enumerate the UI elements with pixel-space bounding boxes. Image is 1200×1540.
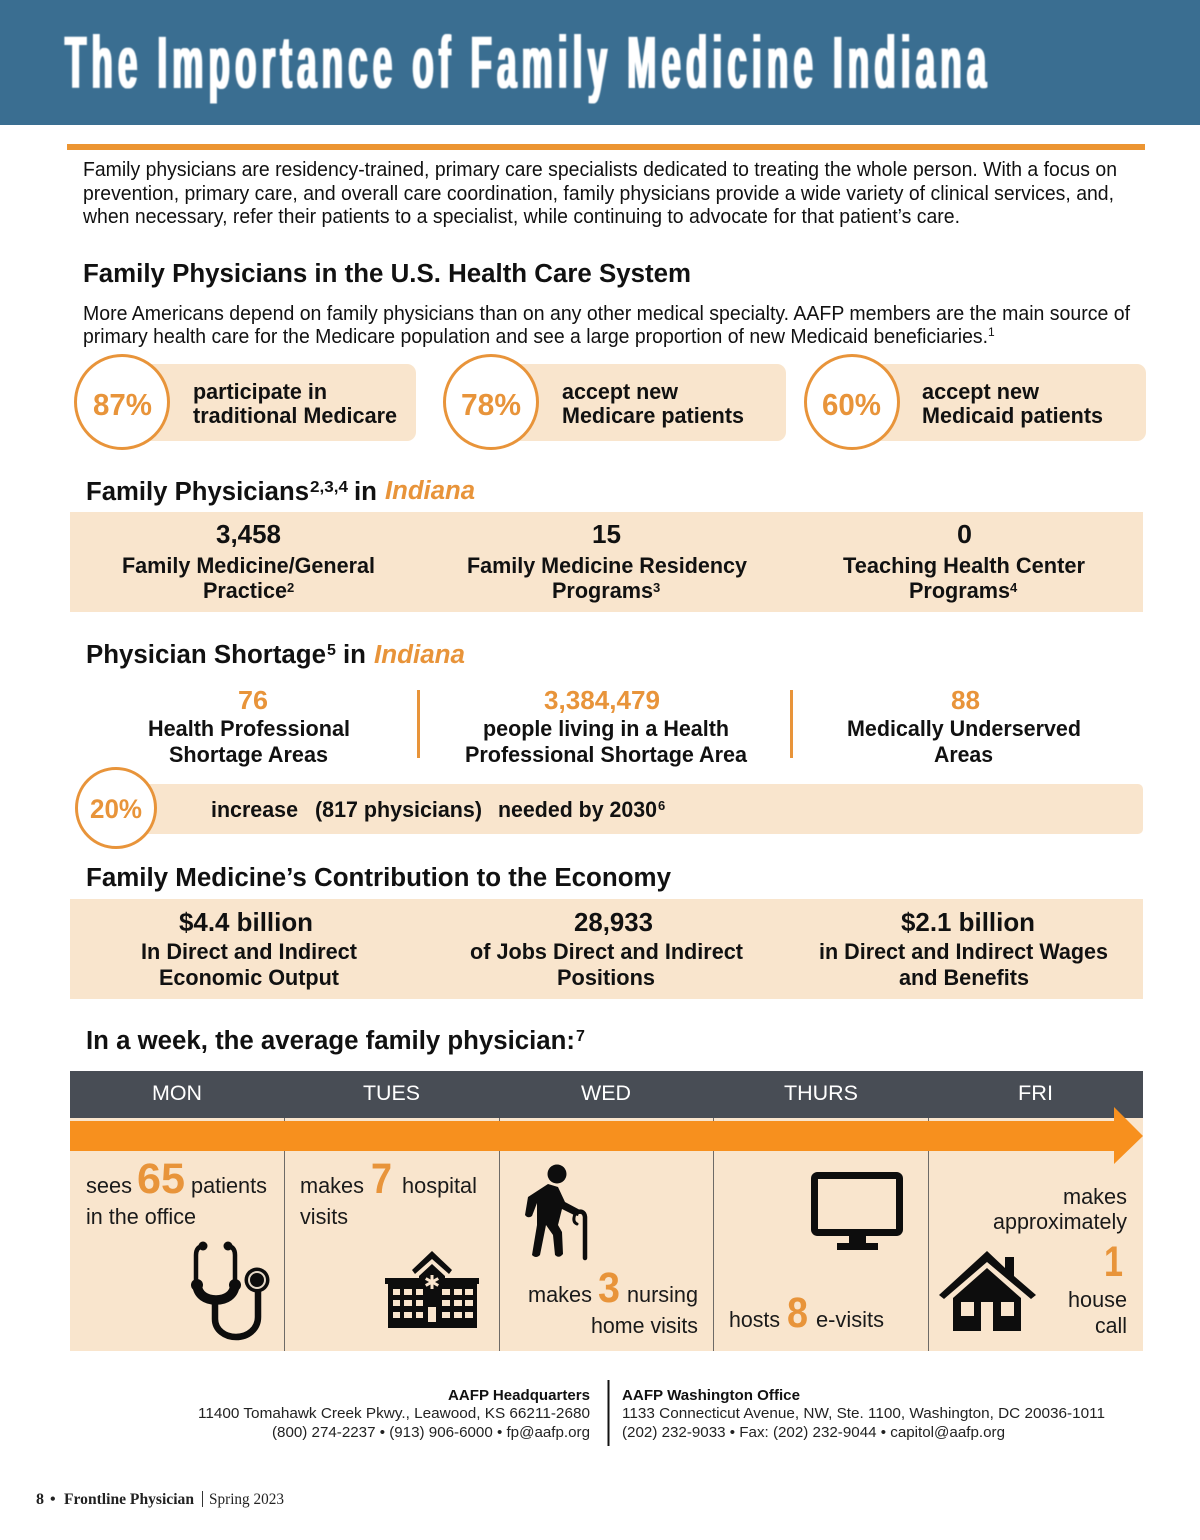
- stat: 60% new Medicaid patients: [806, 356, 1146, 448]
- shortage stat: 76 areas: Shortage Areas: [169, 742, 328, 767]
- heading: average week: 7: [576, 1028, 585, 1045]
- panel: Indiana physician counts: [70, 512, 1143, 612]
- tuesday text: hospital: [402, 1173, 477, 1198]
- heading: family physicians in Indiana: 2,3,4: [310, 479, 348, 496]
- shortage stat: 88 underserved areas: [847, 685, 1081, 767]
- page footer: publication line: Spring 2023: [209, 1491, 284, 1508]
- residency programs count: Family Medicine Residency: [467, 553, 747, 578]
- jobs: 28,933: [574, 907, 653, 937]
- economic output: [141, 907, 357, 990]
- icon: house: [939, 1251, 1036, 1331]
- wednesday text: [528, 1264, 698, 1338]
- friday text: approximately: [993, 1209, 1127, 1234]
- heading: physician shortage in Indiana: Indiana: [374, 641, 465, 669]
- teaching health center count: Teaching Health Center: [843, 553, 1085, 578]
- thursday text: hosts: [729, 1307, 780, 1332]
- shortage stat: 76 areas: [148, 685, 350, 767]
- jobs: [470, 907, 743, 990]
- wages and benefits: [819, 907, 1108, 990]
- monday text: [86, 1155, 267, 1229]
- shortage stat: 88 underserved areas: 88: [951, 685, 980, 715]
- callout: 20% increase needed: increase: [211, 797, 298, 822]
- footer: AAFP Washington office address: AAFP Washington Office: [622, 1387, 800, 1404]
- family medicine count: 3,458: [216, 519, 281, 549]
- thursday text: [729, 1289, 884, 1337]
- heading: family physicians in Indiana: in: [354, 478, 377, 506]
- panel: weekly schedule: [70, 1071, 1143, 1351]
- family medicine count: 2: [287, 580, 294, 595]
- stat: 60% new Medicaid patients: Medicaid patients: [922, 403, 1103, 428]
- stat: 60% new Medicaid patients: 60%: [822, 387, 881, 422]
- jobs: Positions: [557, 965, 655, 990]
- footer: AAFP headquarters address: 11400 Tomahawk Creek Pkwy., Leawood, KS 66211-2680: [198, 1405, 590, 1422]
- shortage stat: 3,384,479 people: people living in a Health: [483, 716, 729, 741]
- heading: family physicians in Indiana: Family Physicians: [86, 478, 309, 506]
- icon: hospital: [385, 1251, 479, 1328]
- health care system text: 1: [988, 325, 995, 339]
- wednesday text: nursing: [627, 1282, 698, 1307]
- monday text: 65: [137, 1155, 185, 1203]
- stat: 78% new Medicare patients: [444, 356, 786, 448]
- wages and benefits: and Benefits: [899, 965, 1029, 990]
- tuesday text: [300, 1155, 477, 1229]
- stat: 78% new Medicare patients: 78%: [461, 387, 521, 422]
- monday text: in the office: [86, 1204, 196, 1229]
- shortage stat: 76 areas: Health Professional: [148, 716, 350, 741]
- heading: physician shortage in Indiana: [86, 641, 465, 669]
- teaching health center count: Programs: [909, 578, 1010, 603]
- shortage stat: 76 areas: 76: [238, 685, 268, 715]
- day labels: WED: [581, 1081, 631, 1105]
- friday text: makes: [1063, 1184, 1127, 1209]
- header banner with title: [0, 0, 1200, 125]
- day labels: MON: [152, 1081, 202, 1105]
- wednesday text: home visits: [591, 1313, 698, 1338]
- monday text: patients: [191, 1173, 267, 1198]
- footer: AAFP Washington office address: [622, 1387, 1105, 1441]
- family medicine count: Family Medicine/General: [122, 553, 375, 578]
- shortage stat: 88 underserved areas: Medically Underserved: [847, 716, 1081, 741]
- friday text: call: [1095, 1313, 1127, 1338]
- footer: AAFP headquarters address: AAFP Headquarters: [448, 1387, 590, 1404]
- stat: 60% new Medicaid patients: accept new: [922, 379, 1039, 404]
- family medicine count: Practice: [203, 578, 287, 603]
- callout: 20% increase needed: [76, 768, 1143, 848]
- thursday text: e-visits: [816, 1307, 884, 1332]
- friday text: 1: [1104, 1238, 1123, 1286]
- footer: AAFP Washington office address: 1133 Connecticut Avenue, NW, Ste. 1100, Washington, DC 20036-1011: [622, 1405, 1105, 1422]
- page footer: publication line: 8: [36, 1491, 44, 1508]
- economic output: Economic Output: [159, 965, 339, 990]
- footer: AAFP headquarters address: (800) 274-2237 • (913) 906-6000 • fp@aafp.org: [272, 1424, 590, 1441]
- tuesday text: visits: [300, 1204, 348, 1229]
- economic output: $4.4 billion: [179, 907, 313, 937]
- heading: physician shortage in Indiana: in: [343, 641, 366, 669]
- heading: physician shortage in Indiana: Physician Shortage: [86, 641, 326, 669]
- monday text: sees: [86, 1173, 132, 1198]
- jobs: of Jobs Direct and Indirect: [470, 939, 743, 964]
- teaching health center count: 4: [1010, 580, 1018, 595]
- day labels: THURS: [784, 1081, 858, 1105]
- shortage stat: 3,384,479 people: 3,384,479: [544, 685, 660, 715]
- wednesday text: 3: [598, 1264, 620, 1312]
- callout: 20% increase needed: (817 physicians): [315, 797, 482, 822]
- heading: family physicians in the health care system: Family Physicians in the U.S. Health Care System: [83, 260, 691, 288]
- intro text: [82, 159, 1117, 228]
- page footer: publication line: [36, 1491, 284, 1508]
- stat: 87% traditional Medicare: traditional Medicare: [193, 403, 397, 428]
- day labels: [152, 1081, 1053, 1105]
- footer: AAFP Washington office address: (202) 232-9033 • Fax: (202) 232-9044 • capitol@aafp.org: [622, 1424, 1005, 1441]
- intro text: prevention, primary care, and overall care coordination, family physicians provide a wide variety of clinical services, and,: [83, 183, 1114, 205]
- thursday text: 8: [787, 1289, 808, 1337]
- residency programs count: 3: [653, 580, 660, 595]
- footer: AAFP headquarters address: [198, 1387, 590, 1441]
- title: The Importance of Family Medicine Indiana: [65, 23, 987, 105]
- callout: 20% increase needed: needed by 2030: [498, 797, 657, 822]
- callout: 20% increase needed: 6: [658, 798, 665, 813]
- residency programs count: Programs: [552, 578, 653, 603]
- wednesday text: makes: [528, 1282, 592, 1307]
- shortage stat: 3,384,479 people: [465, 685, 747, 767]
- arrow: week timeline: [70, 1107, 1143, 1164]
- stat: 87% traditional Medicare: participate in: [193, 379, 327, 404]
- wages and benefits: in Direct and Indirect Wages: [819, 939, 1108, 964]
- shortage stat: 88 underserved areas: Areas: [934, 742, 993, 767]
- wages and benefits: $2.1 billion: [901, 907, 1035, 937]
- residency programs count: 15: [592, 519, 621, 549]
- stat: 87% traditional Medicare: 87%: [93, 387, 152, 422]
- stat: 78% new Medicare patients: accept new: [562, 379, 678, 404]
- stat: 87% traditional Medicare: [76, 356, 416, 448]
- panel: economic contribution: [70, 899, 1143, 999]
- day labels: TUES: [363, 1081, 420, 1105]
- economic output: In Direct and Indirect: [141, 939, 357, 964]
- icon: computer monitor: [814, 1176, 900, 1250]
- intro text: Family physicians are residency-trained, primary care specialists dedicated to treating the whole person. With a focus on: [83, 159, 1117, 181]
- tuesday text: 7: [371, 1155, 392, 1203]
- residency programs count: [467, 519, 747, 603]
- page footer: publication line: Frontline Physician: [64, 1491, 194, 1508]
- health care system text: [83, 303, 1130, 348]
- heading: family physicians in Indiana: Indiana: [385, 477, 475, 505]
- shortage stat: 3,384,479 people: Professional Shortage Area: [465, 742, 747, 767]
- page footer: publication line: •: [50, 1491, 56, 1508]
- teaching health center count: [843, 519, 1085, 603]
- health care system text: More Americans depend on family physicians than on any other medical specialty. AAFP members are the main source of: [83, 303, 1130, 325]
- callout: 20% increase needed: 20%: [90, 794, 142, 824]
- heading: physician shortage in Indiana: 5: [327, 642, 336, 659]
- stat: 78% new Medicare patients: Medicare patients: [562, 403, 744, 428]
- heading: average week: In a week, the average family physician:: [86, 1027, 575, 1055]
- icon: stethoscope: [191, 1242, 270, 1337]
- friday text: [993, 1184, 1127, 1338]
- family medicine count: [122, 519, 375, 603]
- tuesday text: makes: [300, 1173, 364, 1198]
- heading: family physicians in Indiana: [86, 477, 475, 506]
- heading: economy contribution: Family Medicine’s Contribution to the Economy: [86, 864, 672, 892]
- teaching health center count: 0: [957, 519, 972, 549]
- friday text: house: [1068, 1287, 1127, 1312]
- icon: elderly person with cane: [525, 1164, 585, 1258]
- day labels: FRI: [1018, 1081, 1053, 1105]
- health care system text: primary health care for the Medicare population and see a large proportion of new Medicaid beneficiaries.: [83, 326, 988, 348]
- intro text: when necessary, refer their patients to a specialist, while continuing to advocate for that patient’s care.: [82, 206, 960, 228]
